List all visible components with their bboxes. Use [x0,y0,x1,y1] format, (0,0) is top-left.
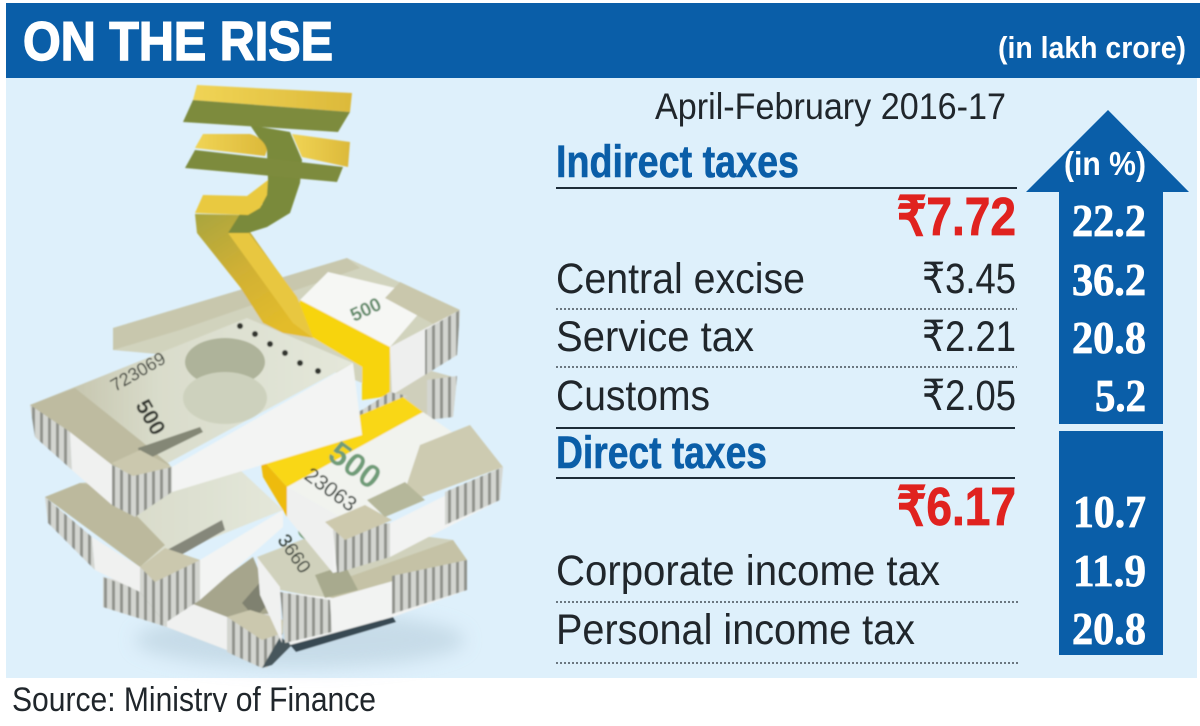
banknote text: serial: 723069 [107,348,169,395]
row: customs [556,372,1016,420]
leg front [195,214,313,338]
heading: indirect taxes: Indirect taxes [556,136,799,187]
top bar front [183,100,350,132]
row: central excise: Central excise [556,255,805,303]
banknote text: 500: 500 [290,509,354,572]
portrait [185,338,265,386]
dots [237,323,321,374]
middle bar left top [195,134,267,156]
row: service tax: ₹2.21 [922,313,1016,361]
unit note: (in lakh crore) [998,30,1186,65]
banknote text: 500: 500 [322,434,388,496]
header banner [6,3,1200,78]
banknote text: serial: 3660 [273,531,314,578]
middle bar front [185,150,343,182]
heading: direct taxes: Direct taxes [556,427,767,478]
band: yellow wrapper [260,397,423,517]
row: central excise: ₹3.45 [922,255,1016,303]
bar: direct tax percentages: 20.8 [1072,603,1146,654]
period label: April-February 2016-17 [655,86,1006,127]
bar: direct tax percentages [1059,431,1163,655]
stack: middle left [45,470,283,623]
illustration: money stacks and rupee symbol [30,85,503,668]
arrow: growth percentages: 36.2 [1072,254,1146,305]
stack: bottom right [257,509,467,652]
stack: behind right [385,365,457,420]
ground shadow [135,612,465,668]
row: corporate income tax: Corporate income tax [556,547,940,595]
row: central excise [556,255,1016,303]
banknote text: serial: 23063 [300,463,361,516]
bar: direct tax percentages: 11.9 [1073,545,1146,596]
band: yellow wrapper [295,300,390,400]
arrow: growth percentages: 20.8 [1072,312,1146,363]
arrow: growth percentages: 5.2 [1095,370,1146,421]
top bar face [193,85,352,112]
total: direct: ₹6.17 [897,477,1016,537]
lower bar [195,180,268,215]
total: indirect: ₹7.72 [897,187,1016,247]
middle bar right top [292,134,350,167]
stack: rear top with band [113,258,460,400]
bar: direct tax percentages: 10.7 [1073,486,1146,537]
leg highlight [228,232,313,338]
banknote text: 500: 500 [347,294,385,327]
row: personal income tax: Personal income tax [556,606,915,654]
banknote text: denomination: 500 [131,395,171,439]
icon: rupee symbol [183,85,352,338]
row: customs: Customs [556,372,710,420]
arrow label: (in %) [1064,145,1146,182]
row: service tax: Service tax [556,313,754,361]
stack: right with band [260,392,503,573]
stack: top front [30,318,362,517]
row: service tax [556,313,1016,361]
row: customs: ₹2.05 [922,372,1016,420]
arrow: growth percentages [1026,110,1189,424]
table: tax figures [556,86,1018,663]
curved body [228,125,302,233]
stack: bottom rear [103,557,292,668]
title: ON THE RISE [23,10,333,72]
arrow: growth percentages: 22.2 [1072,195,1146,246]
source note: Source: Ministry of Finance [12,681,376,719]
